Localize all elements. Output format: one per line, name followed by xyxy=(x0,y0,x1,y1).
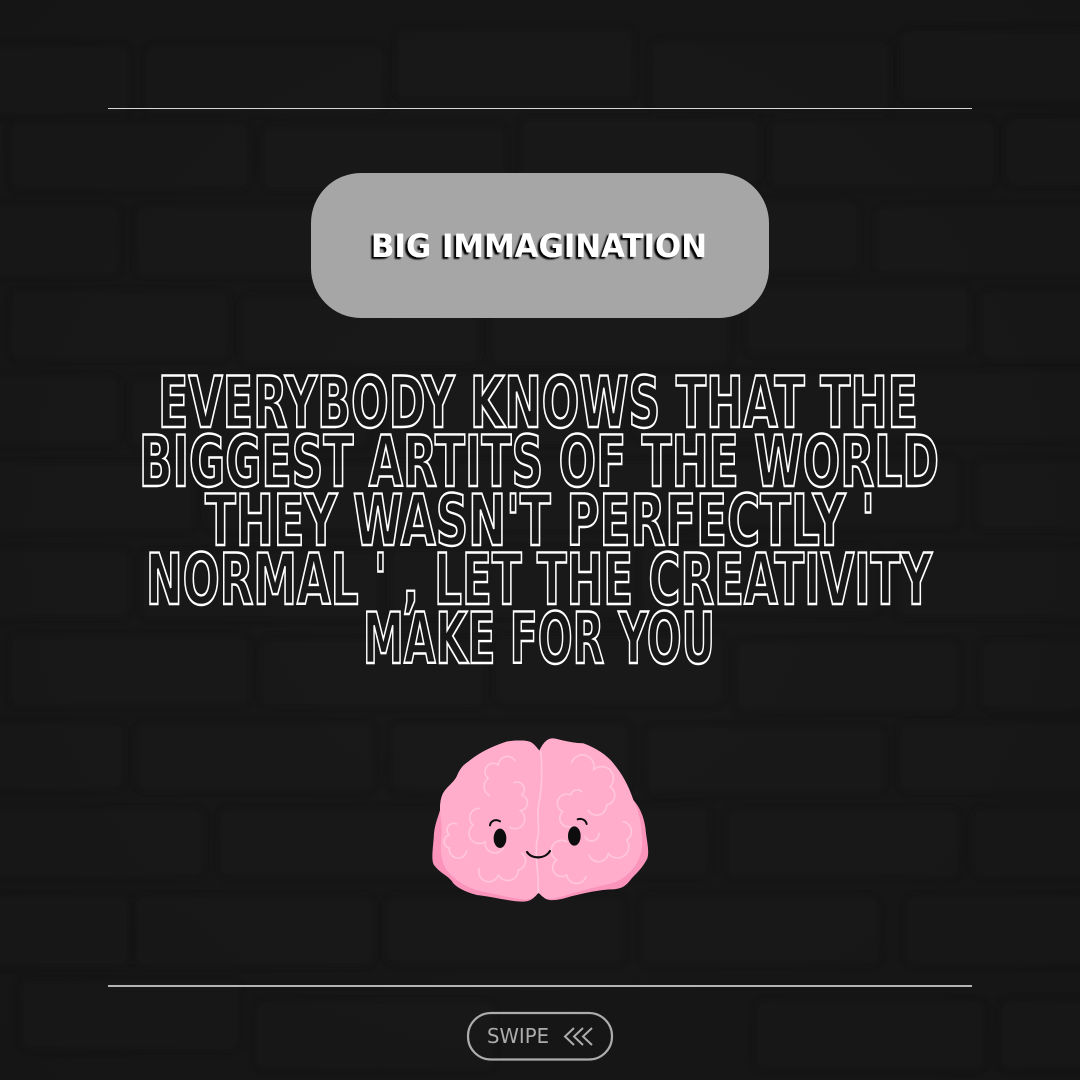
bottom divider line xyxy=(108,985,972,987)
top divider line xyxy=(108,108,972,109)
swipe button: SWIPE xyxy=(487,1024,549,1048)
heading: outlined statement xyxy=(139,362,939,680)
brain face xyxy=(490,819,587,857)
swipe button xyxy=(468,1013,612,1060)
icon: smiling pink brain xyxy=(432,738,648,902)
brain light face xyxy=(440,738,642,899)
icon: triple chevrons xyxy=(565,1028,592,1045)
brain shadow side xyxy=(432,738,648,902)
brain folds xyxy=(444,752,631,893)
badge: big immagination xyxy=(311,173,769,318)
badge: big immagination: BIG IMMAGINATION xyxy=(371,227,707,265)
heading: outlined statement: MAKE FOR YOU xyxy=(363,598,715,680)
